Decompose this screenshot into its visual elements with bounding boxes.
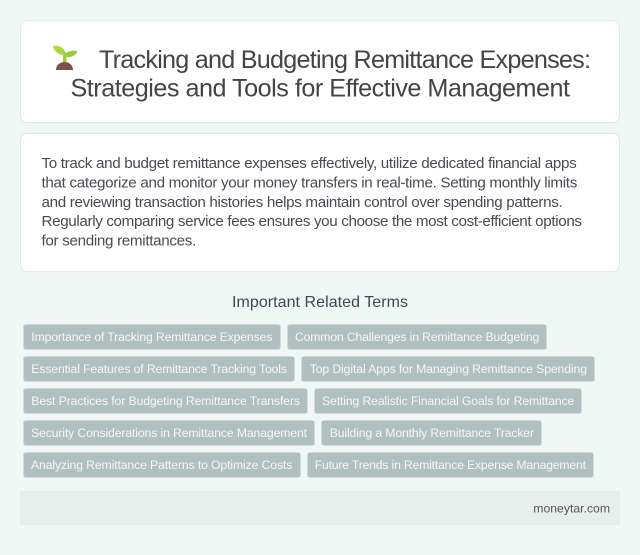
summary text: that categorize and monitor your money transfers in real-time. Setting monthly limits	[42, 174, 578, 191]
title text: Strategies and Tools for Effective Management	[70, 74, 570, 102]
heading: important related terms: Important Related Terms	[232, 294, 408, 311]
tag	[308, 452, 594, 478]
tag	[24, 452, 300, 478]
tag list	[24, 324, 594, 478]
tag: Top Digital Apps for Managing Remittance Spending	[310, 362, 587, 376]
tag	[24, 420, 314, 446]
tag: Building a Monthly Remittance Tracker	[330, 426, 534, 440]
summary text	[42, 155, 582, 250]
summary text: Regularly comparing service fees ensures you choose the most cost-efficient options	[42, 213, 582, 230]
panel: summary card	[20, 134, 620, 272]
tag: Future Trends in Remittance Expense Management	[315, 458, 587, 472]
tag	[24, 388, 308, 414]
summary text: To track and budget remittance expenses effectively, utilize dedicated financial apps	[42, 155, 577, 172]
tag	[24, 356, 294, 382]
tag: Best Practices for Budgeting Remittance Transfers	[31, 394, 300, 408]
tag	[322, 420, 542, 446]
tag	[302, 356, 594, 382]
tag: Common Challenges in Remittance Budgeting	[295, 330, 539, 344]
tag	[314, 388, 582, 414]
footer source text: moneytar.com	[533, 501, 610, 515]
tag: Security Considerations in Remittance Management	[31, 426, 308, 440]
panel: title card	[20, 20, 620, 122]
tag: Analyzing Remittance Patterns to Optimize Costs	[31, 458, 292, 472]
summary text: for sending remittances.	[42, 233, 196, 250]
summary text: and reviewing transaction histories helps maintain control over spending patterns.	[42, 194, 563, 211]
tag: Essential Features of Remittance Tracking Tools	[31, 362, 287, 376]
title text: Tracking and Budgeting Remittance Expenses:	[99, 46, 591, 74]
icon: seedling	[53, 46, 78, 70]
footer	[20, 491, 620, 525]
tag: Setting Realistic Financial Goals for Remittance	[322, 394, 575, 408]
title text	[70, 46, 591, 102]
tag: Importance of Tracking Remittance Expenses	[31, 330, 272, 344]
tag	[24, 324, 280, 350]
tag	[288, 324, 546, 350]
